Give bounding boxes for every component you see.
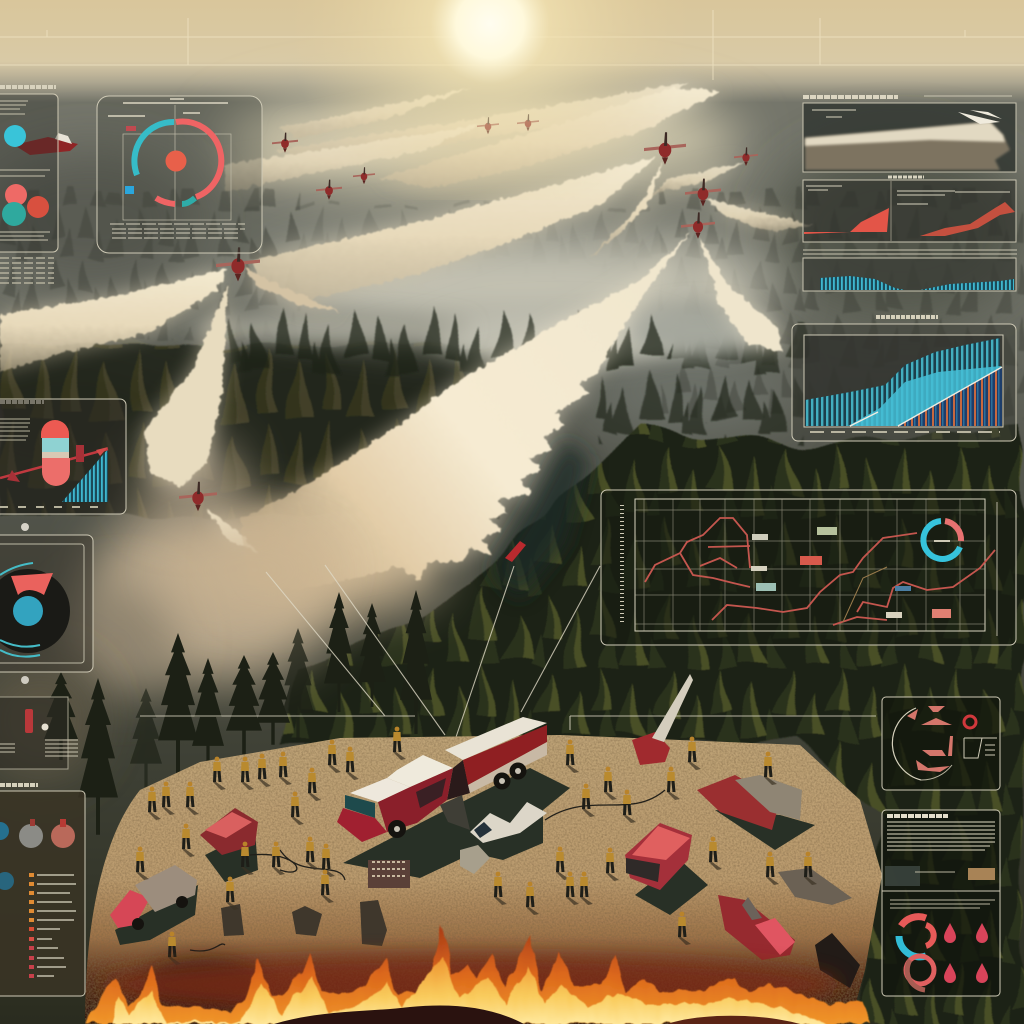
cluster of stat circles — [2, 184, 49, 226]
target icon — [964, 716, 976, 728]
ash mound — [274, 1005, 524, 1024]
fire front — [85, 925, 870, 1024]
panel: trend lines — [803, 177, 1016, 242]
flames: bright core — [110, 955, 830, 1024]
panel: left tanker card — [0, 399, 126, 514]
flames: outer orange — [85, 925, 870, 1024]
trend area right — [920, 202, 1015, 236]
ring: lower segments — [156, 198, 195, 204]
hoses — [190, 790, 665, 951]
dial sector — [11, 573, 53, 595]
smoke bank, lower left — [0, 440, 440, 780]
panel: left legend list — [0, 785, 85, 996]
panel: bottom right radial plan — [882, 697, 1000, 790]
sun — [0, 0, 1024, 200]
truck: right flatbed — [697, 775, 802, 830]
dial centre — [13, 596, 43, 626]
white pickup and crate — [368, 802, 547, 888]
solid cyan wedge — [848, 366, 1001, 426]
dark ember shading, lower left — [145, 960, 265, 1010]
donut charts — [899, 917, 934, 990]
plume glow — [0, 82, 812, 590]
gauge heading — [108, 99, 228, 116]
pill gauge — [41, 420, 70, 486]
firefighter crew — [136, 727, 817, 965]
gear stacks — [221, 900, 387, 946]
bar wedge — [62, 449, 108, 502]
panel: band bars — [803, 250, 1017, 291]
vehicle shadows — [115, 768, 815, 945]
panel: retardant drop image — [803, 96, 1016, 172]
near conifer forest on right — [280, 428, 1024, 1024]
panel: radial gauge — [97, 96, 262, 253]
panel: left radial dial — [0, 535, 93, 672]
panel: left status column — [0, 697, 78, 769]
support trucks — [110, 674, 860, 988]
tanker line — [0, 449, 108, 478]
distant misty tree line — [0, 190, 1024, 515]
drop icons — [944, 923, 988, 983]
panel: bottom right summary — [882, 810, 1000, 996]
perimeter routes — [645, 518, 995, 625]
truck: burnt vehicle — [815, 933, 860, 988]
map grid — [635, 499, 985, 631]
ash mound right — [667, 1016, 800, 1024]
panel: top left data card — [0, 87, 58, 283]
thin cyan bars — [805, 338, 1000, 426]
smoke wash over the plume end — [165, 530, 335, 610]
trend area left — [804, 208, 889, 234]
white edge — [850, 367, 1002, 426]
fire glow — [100, 955, 840, 1015]
warm wedge — [898, 367, 1002, 426]
clearing ground — [85, 735, 882, 1024]
top ruler lines — [0, 10, 1024, 80]
forest tone regions — [0, 85, 1024, 495]
valley fog — [190, 235, 780, 372]
truck: lower left pickup — [110, 865, 197, 930]
mini markers — [125, 126, 136, 194]
map labels — [751, 527, 951, 618]
legend swatches — [29, 873, 34, 978]
truck: lower right pickup — [718, 895, 795, 960]
retardant plumes — [0, 82, 812, 590]
panel: rising bar chart — [792, 317, 1016, 441]
panel: fire perimeter map — [601, 490, 1016, 645]
ring: red — [176, 121, 221, 197]
truck: ladder unit — [632, 674, 693, 765]
card heading bar — [0, 85, 56, 89]
tanker lead, upper left panel — [14, 133, 78, 155]
truck: left red rig — [200, 808, 258, 855]
gauge centre — [166, 150, 186, 172]
donut gauge — [923, 521, 961, 559]
leader lines — [140, 565, 876, 740]
aerial tankers — [14, 114, 758, 562]
ring: cyan — [134, 122, 174, 175]
icon: small marker — [21, 523, 29, 531]
main fire engine — [337, 717, 547, 842]
hose coil — [778, 868, 852, 905]
plan segments — [907, 706, 953, 772]
teal shadow under the big plume — [490, 440, 590, 600]
icon: small marker — [21, 676, 29, 684]
foreground pines — [44, 590, 432, 835]
truck: centre engine — [625, 823, 692, 890]
